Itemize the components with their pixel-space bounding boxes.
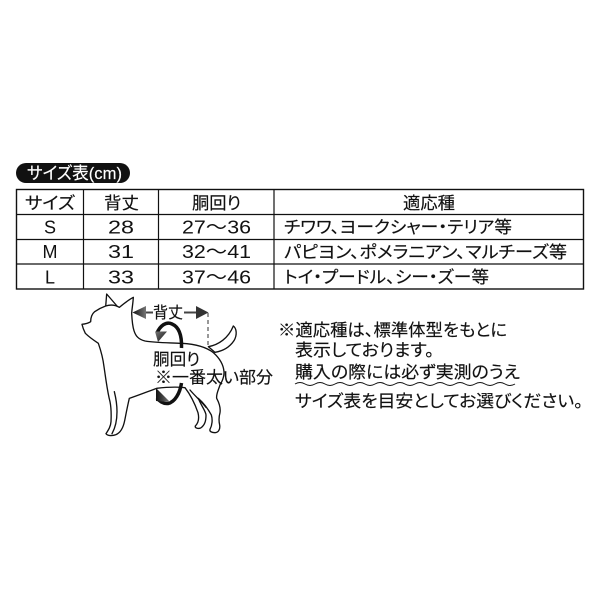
- arrow: girth lower: [156, 383, 182, 404]
- arrow: back length: [132, 306, 208, 319]
- label: back length: 背丈: [153, 304, 183, 322]
- note line 4: サイズ表を目安としてお選びください。: [295, 392, 583, 411]
- label: widest part: ※一番太い部分: [155, 368, 274, 387]
- table header row: 適応種: [403, 194, 455, 213]
- table header row: 背丈: [104, 194, 139, 213]
- dog measurement diagram: [82, 294, 274, 436]
- notes text block: [278, 321, 583, 411]
- table row L: 33: [108, 268, 134, 288]
- table row S: 28: [108, 218, 134, 238]
- note line 2: 表示しております。: [295, 341, 434, 360]
- table header row: サイズ: [25, 194, 76, 213]
- table row L: L: [45, 268, 55, 288]
- wavy underline: [295, 382, 515, 386]
- table row L: トイ・プードル、シー・ズー等: [284, 268, 489, 287]
- note line 3: 購入の際には必ず実測のうえ: [295, 363, 520, 382]
- table row M: パピヨン、ポメラニアン、マルチーズ等: [284, 243, 567, 262]
- table row S: S: [44, 218, 56, 238]
- table row L: [45, 268, 489, 288]
- table row L: 37～46: [182, 268, 251, 288]
- table row M: 32～41: [182, 242, 251, 262]
- icon: dog outline: [82, 294, 236, 436]
- table row S: チワワ、ヨークシャー・テリア等: [284, 218, 512, 237]
- size table title pill: サイズ表(cm): [27, 164, 122, 183]
- label: girth: 胴回り: [153, 350, 200, 369]
- size table: [16, 189, 584, 289]
- table row M: [42, 242, 567, 262]
- table header row: 胴回り: [192, 194, 241, 213]
- table row S: [44, 218, 512, 238]
- table row S: 27～36: [182, 218, 251, 238]
- table row M: 31: [108, 242, 134, 262]
- arrow: girth upper: [155, 323, 182, 348]
- table header row: [25, 194, 455, 213]
- table row M: M: [42, 242, 58, 262]
- dashed back-length guide: [207, 313, 209, 345]
- note line 1: ※適応種は、標準体型をもとに: [278, 321, 507, 340]
